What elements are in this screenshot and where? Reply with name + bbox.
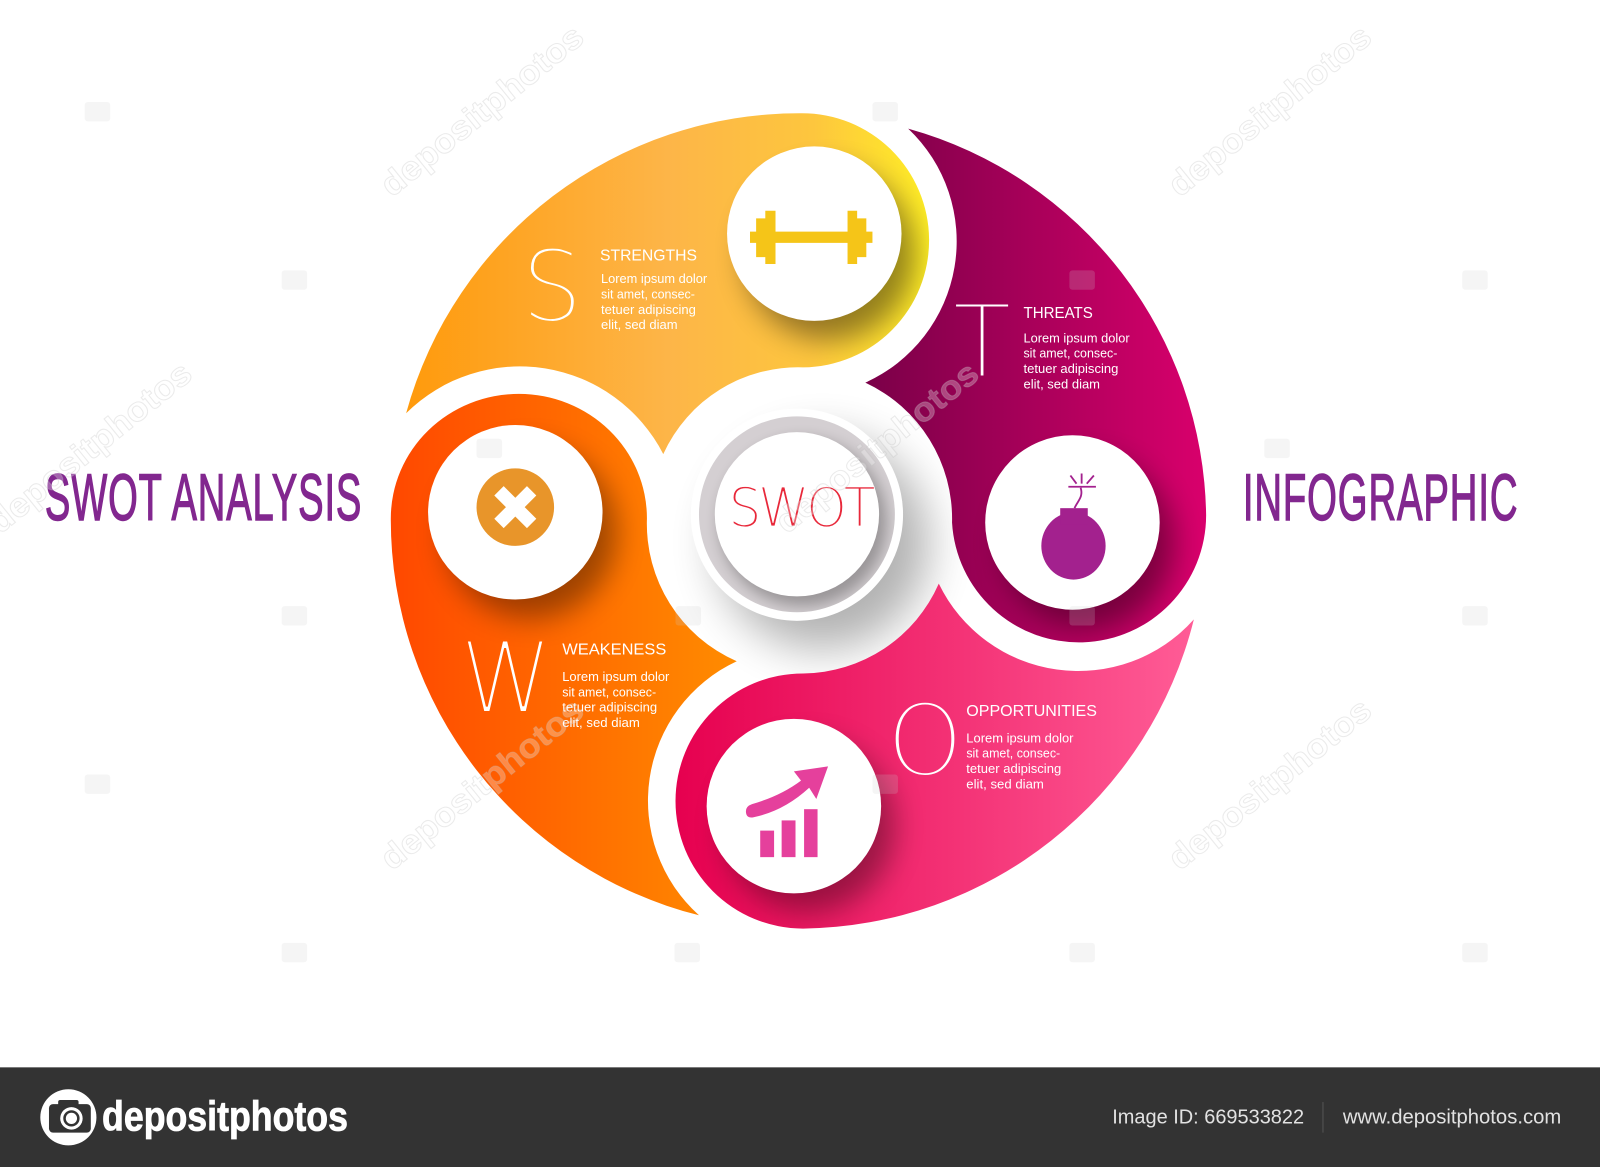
panel: opportunities: [676, 584, 1194, 929]
weakeness icon disc: [428, 425, 603, 599]
opportunities letter O: O: [887, 684, 963, 798]
opportunities icon disc: [707, 719, 881, 893]
weakeness icon shadow: [445, 447, 616, 618]
opportunities body text: elit, sed diam: [966, 776, 1044, 791]
opportunities body text: sit amet, consec-: [966, 746, 1060, 761]
strengths icon disc: [727, 146, 902, 321]
watermark camera icons: [85, 102, 1488, 962]
weakeness heading: WEAKENESS: [562, 642, 666, 659]
opportunities body text: tetuer adipiscing: [966, 761, 1061, 776]
hub inner white disc: [715, 432, 879, 596]
strengths body text: sit amet, consec-: [601, 286, 695, 301]
footer image id: Image ID: 669533822: [1112, 1106, 1304, 1128]
opportunities heading: OPPORTUNITIES: [966, 703, 1097, 720]
strengths body text: tetuer adipiscing: [601, 302, 696, 317]
icon: growth chart: [746, 766, 828, 857]
threats letter T: T: [953, 284, 1011, 401]
threats icon shadow: [1002, 457, 1173, 629]
watermarks: depositphotos: [1161, 18, 1379, 204]
threats body text: tetuer adipiscing: [1023, 361, 1118, 376]
threats body text: sit amet, consec-: [1023, 346, 1117, 361]
hub inner shadow: [719, 439, 887, 606]
strengths heading: STRENGTHS: [600, 248, 697, 265]
panel: strengths: [406, 113, 929, 454]
weakeness body text: Lorem ipsum dolor: [562, 669, 670, 684]
opportunities icon shadow: [723, 741, 895, 912]
opportunities body text: Lorem ipsum dolor: [966, 730, 1074, 745]
weakeness body text: [562, 669, 670, 730]
opportunities segment: [676, 584, 1194, 929]
title left: SWOT ANALYSIS: [45, 461, 362, 535]
hub outer white disc: [691, 409, 903, 621]
strengths segment: [406, 113, 929, 454]
central SWOT hub: [691, 409, 903, 621]
icon: barbell: [750, 211, 872, 264]
weakeness body text: tetuer adipiscing: [562, 700, 657, 715]
panel: weakeness: [391, 394, 737, 915]
strengths body text: [601, 271, 708, 332]
strengths body text: Lorem ipsum dolor: [601, 271, 708, 286]
weakeness body text: sit amet, consec-: [562, 684, 656, 699]
weakeness segment: [391, 394, 737, 915]
watermarks: depositphotos: [1161, 692, 1379, 878]
weakeness body text: elit, sed diam: [562, 715, 640, 730]
icon: bomb: [1041, 473, 1106, 580]
watermarks: [0, 18, 1379, 878]
threats segment: [865, 129, 1206, 642]
watermarks: depositphotos: [374, 18, 591, 204]
threats heading: THREATS: [1023, 305, 1093, 322]
footer band: [0, 1067, 1600, 1167]
hub label: SWOT: [729, 477, 875, 539]
threats body text: Lorem ipsum dolor: [1023, 330, 1130, 345]
icon: footer camera logo: [40, 1089, 96, 1145]
threats body text: [1023, 330, 1130, 391]
strengths body text: elit, sed diam: [601, 317, 678, 332]
opportunities body text: [966, 730, 1074, 791]
watermarks: depositphotos: [374, 692, 591, 878]
threats body text: elit, sed diam: [1023, 376, 1100, 391]
threats icon disc: [985, 435, 1160, 610]
icon: cross badge: [477, 468, 554, 546]
watermarks: depositphotos: [768, 355, 986, 541]
central hub drop shadow: [716, 437, 929, 649]
hub grey ring: [699, 416, 895, 612]
footer url: www.depositphotos.com: [1342, 1106, 1561, 1128]
weakeness letter W: W: [460, 622, 552, 736]
panel: threats: [865, 129, 1206, 642]
strengths letter S: S: [521, 230, 583, 344]
footer background: [0, 1067, 1600, 1167]
strengths icon shadow: [744, 168, 915, 340]
footer brand name: depositphotos: [102, 1093, 348, 1140]
